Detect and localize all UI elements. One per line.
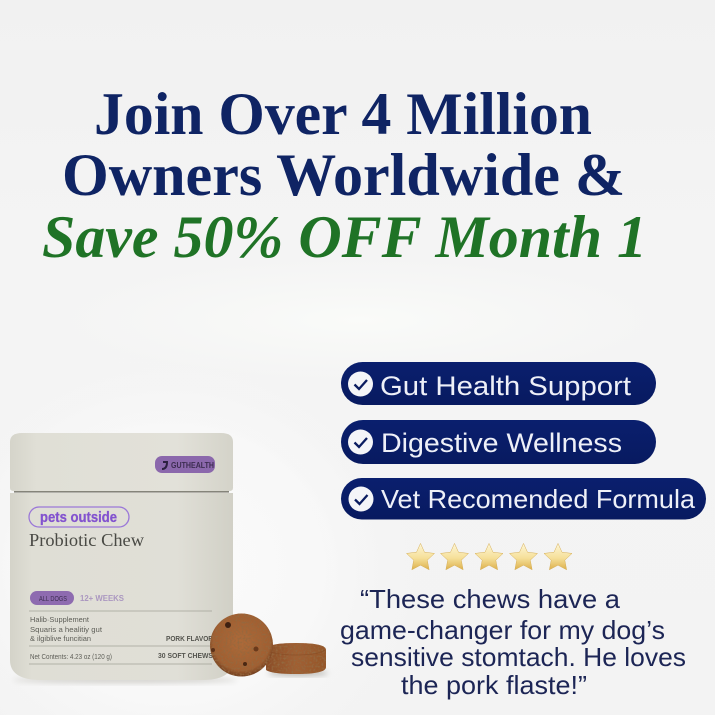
standing chew: [210, 614, 273, 676]
testimonial: [340, 584, 686, 700]
lid seam: [14, 491, 229, 493]
testimonial: “These chews have a: [360, 584, 621, 614]
jar shadow: [13, 677, 237, 683]
title: [42, 81, 647, 270]
brand pill: pets outside: [40, 509, 117, 526]
product name: Probiotic Chew: [29, 530, 144, 550]
badge: gut health: GUTHEALTH: [171, 461, 214, 470]
testimonial: the pork flaste!”: [401, 670, 587, 700]
badge: gut health support: Gut Health Support: [380, 371, 632, 401]
icon: check: [348, 372, 373, 396]
age pill: ALL DOGS: [39, 594, 67, 603]
product jar: [10, 433, 237, 683]
badge: digestive wellness: [341, 420, 656, 464]
title line 2: Owners Worldwide &: [62, 142, 625, 208]
jar lid: [10, 433, 233, 491]
offer line: Save 50% OFF Month 1: [42, 204, 647, 270]
badge: digestive wellness: Digestive Wellness: [381, 428, 622, 458]
badge: vet recommended formula: [341, 478, 706, 520]
description: [30, 615, 103, 643]
flat chew: [266, 643, 328, 676]
star rating: [406, 543, 572, 570]
icon: check: [348, 430, 373, 454]
testimonial: game-changer for my dog’s: [340, 615, 665, 645]
benefit badges: [341, 362, 706, 520]
net contents: Net Contents: 4.23 oz (120 g): [30, 654, 112, 661]
chews: [210, 614, 328, 676]
description: & ilgiblive funcitian: [30, 634, 91, 643]
title line 1: Join Over 4 Million: [94, 81, 592, 147]
age text: 12+ WEEKS: [80, 594, 125, 603]
badge: gut health support: [341, 362, 656, 405]
badge: gut health: [155, 456, 215, 473]
jar body: [10, 493, 233, 680]
flavor: PORK FLAVOR: [166, 634, 214, 643]
age pill: [30, 591, 74, 605]
count: 30 SOFT CHEWS: [158, 651, 213, 660]
testimonial: sensitive stomtach. He loves: [351, 642, 686, 672]
jar rules: [29, 611, 212, 664]
description: Halib·Supplement: [30, 615, 90, 624]
icon: check: [348, 486, 374, 512]
badge: vet recommended formula: Vet Recomended Formula: [381, 484, 696, 514]
description: Squaris a healitiy gut: [30, 625, 103, 634]
